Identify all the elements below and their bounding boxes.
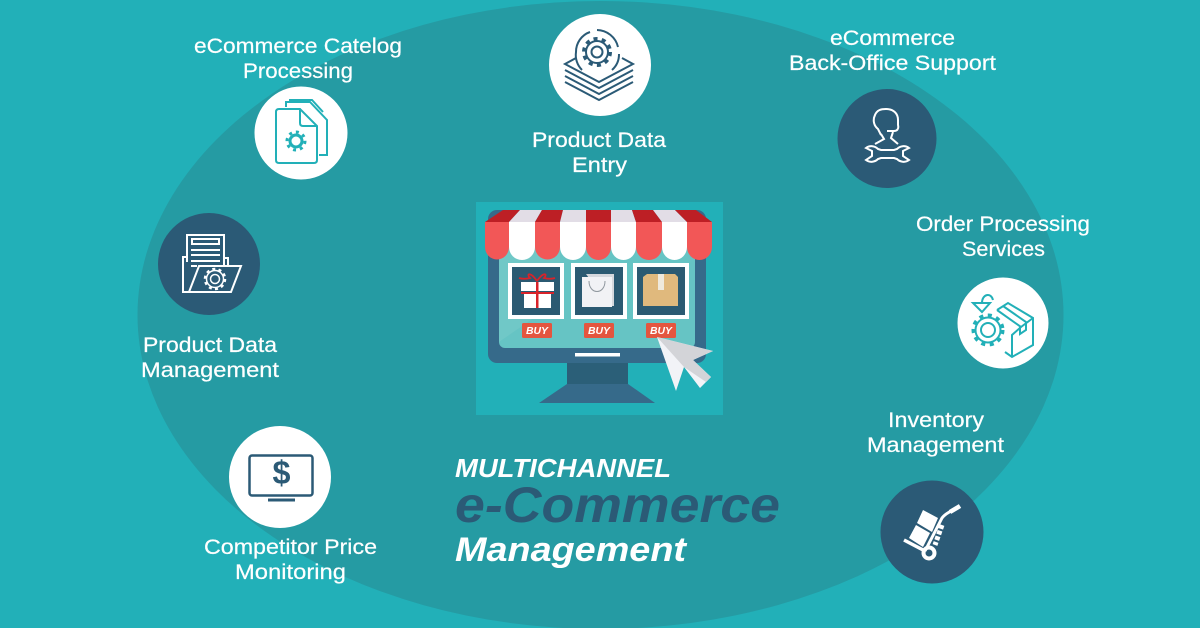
buy buttons: BUY (526, 326, 549, 337)
product tile: gift (510, 265, 562, 317)
label: order processing: Order Processing (916, 213, 1090, 236)
service: competitor price monitoring (229, 426, 331, 528)
buy buttons: BUY (650, 326, 673, 337)
label: eCommerce back-office support: eCommerce (830, 27, 955, 50)
icon: box with gear and arrow (973, 295, 1033, 357)
label: order processing (916, 213, 1090, 261)
icon: gear over stacked layers (565, 30, 633, 100)
label: inventory management (867, 409, 1004, 457)
label: product data entry: Product Data (532, 129, 666, 152)
buy buttons (522, 323, 676, 338)
icon: hand truck (904, 506, 960, 558)
label: competitor price monitoring (204, 536, 377, 584)
center illustration: online storefront (476, 202, 723, 415)
label: product data management (141, 334, 279, 382)
title: e-Commerce (455, 477, 780, 533)
product tile: cardboard box (635, 265, 687, 317)
icon: monitor with dollar: $ (272, 454, 290, 491)
awning (485, 210, 712, 260)
label: eCommerce catalog processing: Processing (243, 60, 353, 83)
label: eCommerce catalog processing (194, 35, 402, 83)
service: eCommerce back-office support (838, 89, 936, 188)
title: MULTICHANNEL (455, 453, 671, 483)
icon: agent with wrench (866, 109, 909, 162)
label: order processing: Services (962, 238, 1045, 261)
label: product data entry: Entry (572, 154, 628, 177)
label: product data management: Management (141, 359, 279, 382)
label: inventory management: Management (867, 434, 1004, 457)
product tile: shopping bag (573, 265, 625, 317)
label: product data entry (532, 129, 666, 177)
service: inventory management (880, 480, 984, 584)
icon: folder with papers and gear (183, 235, 241, 292)
service: order processing (958, 278, 1048, 368)
monitor (488, 210, 706, 403)
central ellipse (138, 1, 1064, 628)
icon: document pages with gear (276, 100, 327, 163)
service: product data entry (549, 14, 651, 116)
title: Management (455, 531, 688, 569)
title (455, 453, 780, 569)
service: product data management (158, 213, 260, 315)
label: competitor price monitoring: Competitor Price (204, 536, 377, 559)
service: eCommerce catalog processing (254, 86, 348, 180)
label: product data management: Product Data (143, 334, 277, 357)
label: eCommerce back-office support (789, 27, 996, 75)
label: inventory management: Inventory (888, 409, 985, 432)
mouse cursor (657, 337, 713, 391)
label: eCommerce catalog processing: eCommerce Catelog (194, 35, 402, 58)
label: eCommerce back-office support: Back-Office Support (789, 52, 996, 75)
label: competitor price monitoring: Monitoring (235, 561, 346, 584)
buy buttons: BUY (588, 326, 611, 337)
